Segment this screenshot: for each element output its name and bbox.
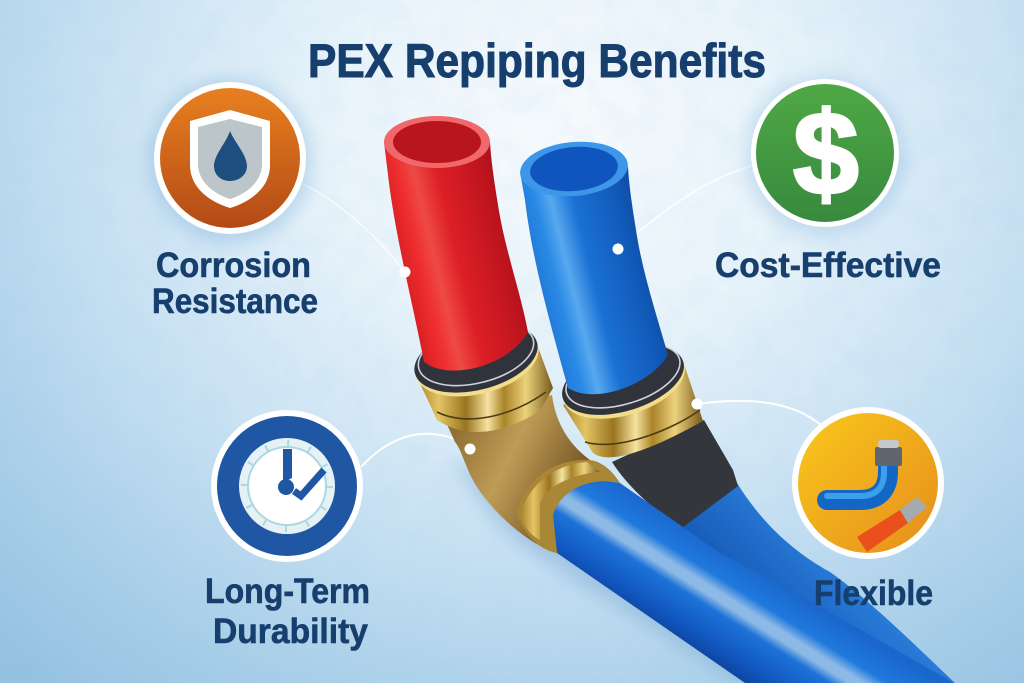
panel: cost-effective <box>715 76 941 285</box>
blue pipe <box>518 137 668 394</box>
icon: shield with water drop <box>148 79 312 243</box>
red pipe fitting <box>407 312 553 432</box>
label: long-term durability: Durability <box>213 612 369 651</box>
blue pipe fitting <box>554 332 703 457</box>
icon: dollar sign <box>745 76 905 236</box>
panel: corrosion resistance <box>148 79 318 321</box>
icon: dollar sign: $ <box>793 88 859 220</box>
leader lines <box>303 166 822 466</box>
brass collar <box>517 460 620 553</box>
label: cost-effective: Cost-Effective <box>715 246 941 285</box>
black sleeve <box>612 420 738 528</box>
panel: long-term durability <box>205 410 370 651</box>
shadow under pipes <box>455 460 820 683</box>
panel: flexible <box>792 407 944 613</box>
callout dots <box>400 244 702 454</box>
label: corrosion resistance: Resistance <box>152 282 318 321</box>
icon: clock with check <box>211 410 363 562</box>
big blue pipe <box>553 481 954 683</box>
back blue pipe <box>680 483 955 683</box>
pipe assembly <box>384 116 955 683</box>
label: corrosion resistance: Corrosion <box>156 246 311 285</box>
icon: bent pipes <box>792 407 944 559</box>
label: long-term durability <box>205 572 370 651</box>
label: flexible: Flexible <box>814 574 933 613</box>
label: corrosion resistance <box>152 246 318 321</box>
red pipe <box>384 116 528 371</box>
brass elbow <box>445 395 610 553</box>
title: PEX Repiping Benefits <box>308 34 766 87</box>
label: long-term durability: Long-Term <box>205 572 370 611</box>
